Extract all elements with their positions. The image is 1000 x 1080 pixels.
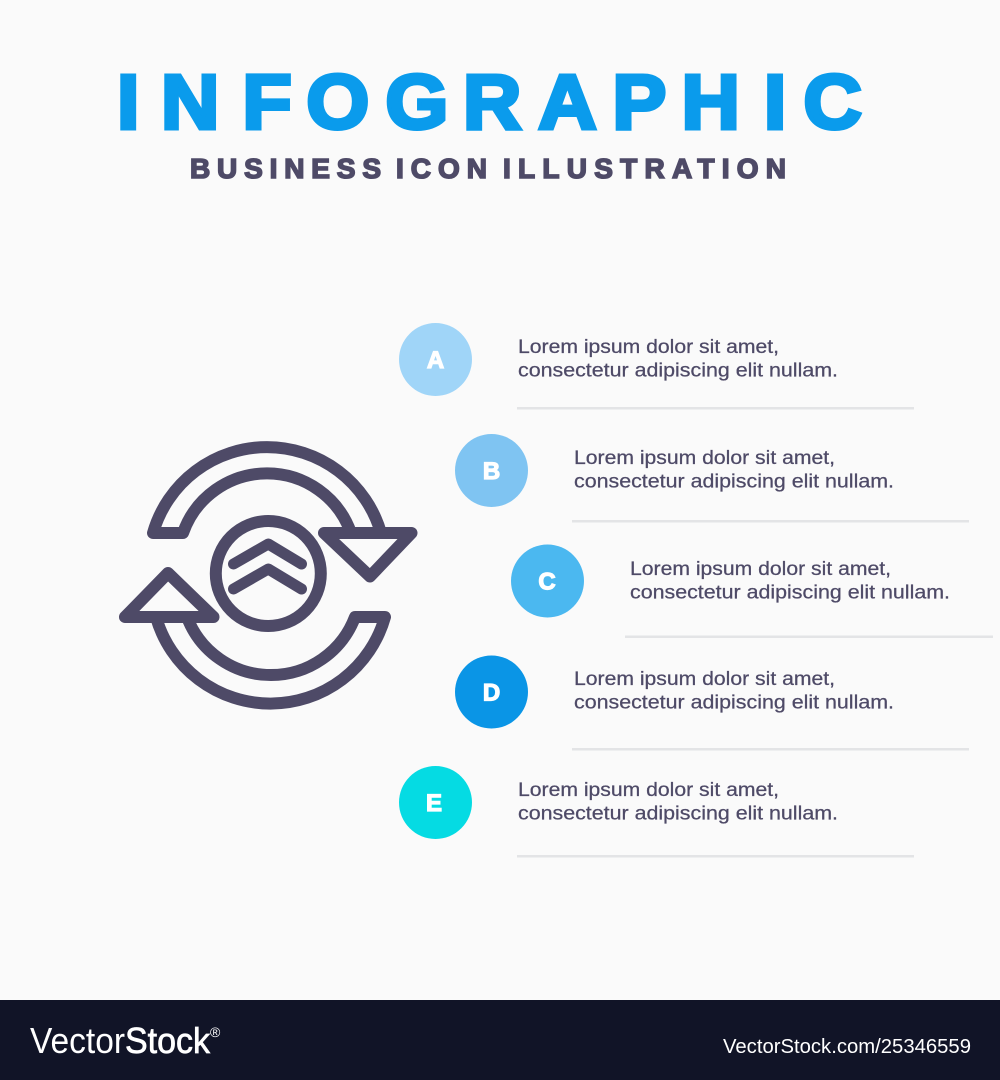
text C: consectetur adipiscing elit nullam. bbox=[630, 582, 950, 604]
subtitle: ILLUSTRATION bbox=[503, 153, 786, 184]
text B: consectetur adipiscing elit nullam. bbox=[574, 472, 894, 492]
left arrow head bbox=[125, 573, 214, 617]
badge C bbox=[511, 544, 584, 618]
text C bbox=[630, 559, 950, 604]
badge A: A bbox=[427, 347, 444, 374]
text B: Lorem ipsum dolor sit amet, bbox=[574, 448, 835, 469]
footer id: VectorStock.com/25346559 bbox=[723, 1036, 971, 1058]
badge D: D bbox=[483, 680, 500, 706]
text E bbox=[518, 780, 838, 824]
text B bbox=[574, 448, 894, 492]
footer logo bbox=[30, 1020, 221, 1061]
item B bbox=[455, 434, 969, 522]
text D: Lorem ipsum dolor sit amet, bbox=[574, 669, 835, 690]
subtitle: ICON bbox=[396, 153, 487, 184]
text E: consectetur adipiscing elit nullam. bbox=[518, 804, 838, 824]
subtitle bbox=[190, 153, 786, 184]
text C: Lorem ipsum dolor sit amet, bbox=[630, 559, 891, 580]
badge A bbox=[399, 323, 472, 396]
item D bbox=[455, 656, 969, 750]
item C bbox=[511, 544, 993, 638]
badge E bbox=[399, 766, 472, 839]
item A bbox=[399, 323, 914, 410]
text A: consectetur adipiscing elit nullam. bbox=[518, 360, 838, 382]
text E: Lorem ipsum dolor sit amet, bbox=[518, 780, 779, 801]
double chevron up bbox=[234, 544, 302, 589]
footer bar bbox=[0, 1000, 1000, 1080]
item E bbox=[399, 766, 914, 858]
text D: consectetur adipiscing elit nullam. bbox=[574, 692, 894, 714]
footer logo: Vector bbox=[30, 1020, 125, 1061]
bottom circular arrow band bbox=[156, 617, 385, 704]
badge C: C bbox=[538, 568, 556, 596]
text D bbox=[574, 669, 894, 714]
right arrow head bbox=[324, 533, 412, 576]
text A: Lorem ipsum dolor sit amet, bbox=[518, 337, 779, 358]
subtitle: BUSINESS bbox=[190, 153, 381, 184]
badge B bbox=[455, 434, 528, 507]
center circle bbox=[216, 521, 321, 626]
badge D bbox=[455, 656, 528, 728]
top circular arrow band bbox=[153, 447, 381, 533]
footer logo: Stock bbox=[125, 1020, 211, 1061]
text A bbox=[518, 337, 838, 382]
footer logo: ® bbox=[210, 1024, 221, 1040]
badge E: E bbox=[426, 790, 442, 817]
title: INFOGRAPHIC bbox=[117, 60, 862, 145]
icon: circular arrows with chevrons bbox=[125, 447, 412, 704]
badge B: B bbox=[483, 458, 500, 485]
